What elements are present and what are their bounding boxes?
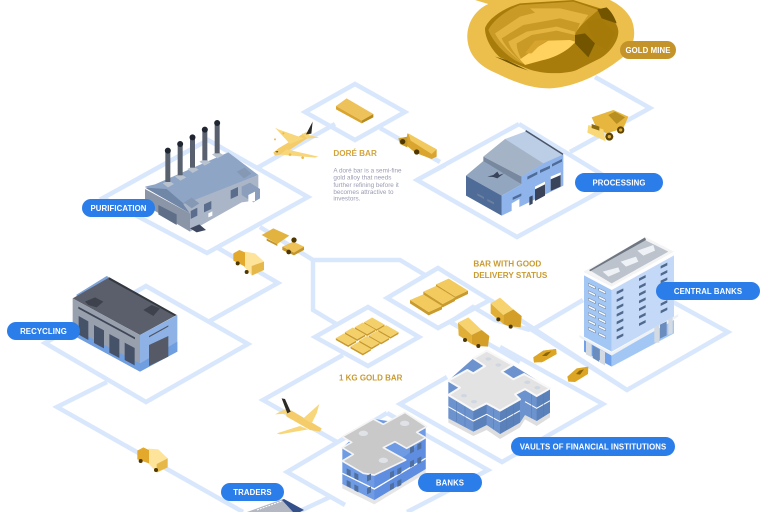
label: recycling: RECYCLING bbox=[20, 327, 67, 336]
text: dore description: becomes attractive to bbox=[333, 189, 394, 196]
gold mine bbox=[467, 0, 634, 88]
factory chimneys bbox=[163, 120, 223, 187]
text: delivery status heading: BAR WITH GOOD bbox=[473, 260, 541, 269]
label: banks: BANKS bbox=[436, 478, 464, 488]
center section bbox=[275, 260, 557, 439]
building: recycling plant bbox=[73, 276, 177, 372]
label: vaults of financial institutions: VAULTS OF FINANCIAL INSTITUTIONS bbox=[520, 442, 666, 452]
text: dore description: gold alloy that needs bbox=[333, 175, 391, 182]
icon: box truck lower bbox=[458, 317, 489, 348]
icon: car 1 bbox=[533, 349, 557, 363]
label: purification: PURIFICATION bbox=[90, 204, 147, 213]
text: dore heading: DORÉ BAR bbox=[333, 148, 377, 158]
icon: airport tug and cart bbox=[262, 228, 304, 255]
icon: bar transport vehicle bbox=[398, 133, 437, 159]
icon: 1 kg gold bars bbox=[336, 317, 398, 355]
flow network lines bbox=[45, 77, 728, 512]
mine surrounding ground bbox=[467, 0, 634, 88]
icon: dore gold bar bbox=[336, 98, 373, 123]
building: banks bbox=[342, 412, 427, 504]
icon: mining dump truck bbox=[587, 110, 628, 141]
building: processing plant bbox=[466, 130, 563, 216]
icon: plane bbox=[275, 398, 322, 434]
label: recycling bbox=[7, 322, 80, 340]
label: banks bbox=[418, 473, 482, 492]
label: purification bbox=[82, 199, 155, 217]
label: central banks: CENTRAL BANKS bbox=[674, 287, 742, 296]
label: traders: TRADERS bbox=[233, 488, 272, 497]
text: dore description: investors. bbox=[333, 196, 361, 203]
dore bar diagram bbox=[233, 98, 437, 276]
icon: cargo plane bbox=[273, 122, 319, 159]
icon: yellow car bbox=[533, 349, 557, 362]
label: processing bbox=[575, 173, 663, 192]
central banks group bbox=[533, 237, 678, 382]
text: dore description: A doré bar is a semi-fine bbox=[333, 168, 402, 175]
label: gold mine: GOLD MINE bbox=[625, 46, 671, 55]
building: traders (partially cropped) bbox=[247, 499, 304, 512]
icon: good delivery bars bbox=[410, 279, 468, 315]
label: vaults of financial institutions bbox=[511, 437, 675, 456]
label: traders bbox=[221, 483, 284, 501]
icon: car 2 bbox=[567, 367, 588, 382]
icon: delivery truck bbox=[233, 250, 264, 276]
text: 1 kg gold bar: 1 KG GOLD BAR bbox=[339, 373, 403, 382]
label: processing: PROCESSING bbox=[592, 178, 646, 188]
label: gold mine bbox=[620, 41, 676, 59]
text: dore description bbox=[333, 168, 402, 203]
text: delivery status heading: DELIVERY STATUS bbox=[473, 271, 548, 280]
icon: box truck upper bbox=[491, 298, 522, 329]
label: central banks bbox=[656, 282, 760, 300]
text: dore description: further refining before it bbox=[333, 182, 399, 189]
icon: factory building bbox=[145, 120, 260, 232]
icon: delivery truck on trader route bbox=[137, 447, 168, 473]
text: delivery status heading bbox=[473, 260, 548, 280]
building: central bank tower bbox=[579, 237, 678, 367]
mine pit bbox=[485, 0, 618, 73]
building: vaults bbox=[448, 351, 550, 439]
